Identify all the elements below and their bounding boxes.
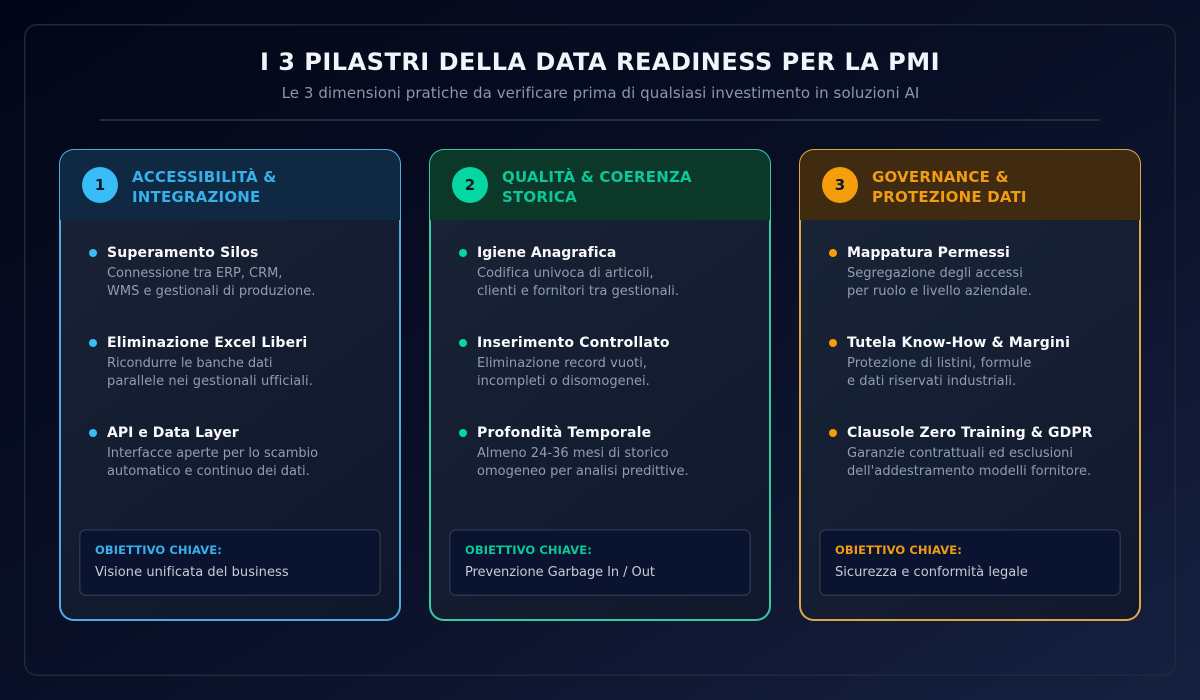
item: igiene anagrafica: Codifica univoca di articoli, <box>477 266 654 281</box>
item: eliminazione excel liberi: Eliminazione Excel Liberi <box>107 335 307 351</box>
item: profondità temporale: Profondità Temporale <box>477 425 651 441</box>
panel: qualità e coerenza storica <box>429 149 771 621</box>
item: inserimento controllato <box>459 335 670 389</box>
item: mappatura permessi: Segregazione degli accessi <box>847 266 1023 281</box>
item: profondità temporale <box>459 425 689 479</box>
item: mappatura permessi: Mappatura Permessi <box>847 245 1010 261</box>
item: superamento silos: Superamento Silos <box>107 245 259 261</box>
callout: obiettivo chiave 1: OBIETTIVO CHIAVE: <box>95 543 222 557</box>
item: tutela know-how e margini: e dati riservati industriali. <box>847 374 1016 389</box>
item: tutela know-how e margini <box>829 335 1070 389</box>
header: pillar 1: INTEGRAZIONE <box>132 188 260 206</box>
callout: obiettivo chiave 3: OBIETTIVO CHIAVE: <box>835 543 962 557</box>
item: api e data layer: API e Data Layer <box>107 425 239 441</box>
item: igiene anagrafica <box>459 245 679 299</box>
item: clausole zero training e gdpr: Garanzie contrattuali ed esclusioni <box>847 446 1073 461</box>
header: pillar 2: STORICA <box>502 188 577 206</box>
item: clausole zero training e gdpr: dell'addestramento modelli fornitore. <box>847 464 1091 479</box>
item: inserimento controllato: Inserimento Controllato <box>477 335 670 351</box>
item: superamento silos: Connessione tra ERP, CRM, <box>107 266 282 281</box>
callout: obiettivo chiave 1 <box>79 529 381 596</box>
callout: obiettivo chiave 2: OBIETTIVO CHIAVE: <box>465 543 592 557</box>
item: eliminazione excel liberi: parallele nei gestionali ufficiali. <box>107 374 313 389</box>
item: api e data layer <box>89 425 318 479</box>
header: pillar 1 <box>60 150 400 220</box>
header: pillar 3: GOVERNANCE & <box>872 168 1009 186</box>
item: eliminazione excel liberi: Ricondurre le banche dati <box>107 356 272 371</box>
item: igiene anagrafica: Igiene Anagrafica <box>477 245 616 261</box>
item: clausole zero training e gdpr <box>829 425 1093 479</box>
item: superamento silos <box>89 245 315 299</box>
item: inserimento controllato: Eliminazione record vuoti, <box>477 356 647 371</box>
item: mappatura permessi <box>829 245 1032 299</box>
header: pillar 3: 3 <box>835 176 845 194</box>
header: pillar 3 <box>800 150 1140 220</box>
item: clausole zero training e gdpr: Clausole Zero Training & GDPR <box>847 425 1093 441</box>
item: inserimento controllato: incompleti o disomogenei. <box>477 374 650 389</box>
item: api e data layer: automatico e continuo dei dati. <box>107 464 310 479</box>
item: profondità temporale: omogeneo per analisi predittive. <box>477 464 689 479</box>
header: pillar 2 <box>430 150 770 220</box>
item: eliminazione excel liberi <box>89 335 313 389</box>
header: pillar 1: 1 <box>95 176 105 194</box>
callout: obiettivo chiave 1: Visione unificata del business <box>95 564 289 580</box>
header: pillar 1: ACCESSIBILITÀ & <box>132 168 277 186</box>
item: tutela know-how e margini: Tutela Know-How & Margini <box>847 335 1070 351</box>
callout: obiettivo chiave 3: Sicurezza e conformità legale <box>835 564 1028 580</box>
panel: accessibilità e integrazione <box>59 149 401 621</box>
callout: obiettivo chiave 3 <box>819 529 1121 596</box>
item: mappatura permessi: per ruolo e livello aziendale. <box>847 284 1032 299</box>
header: pillar 2: QUALITÀ & COERENZA <box>502 168 692 186</box>
header: pillar 3: PROTEZIONE DATI <box>872 188 1027 206</box>
header: pillar 2: 2 <box>465 176 475 194</box>
callout: obiettivo chiave 2 <box>449 529 751 596</box>
item: igiene anagrafica: clienti e fornitori tra gestionali. <box>477 284 679 299</box>
title: I 3 PILASTRI DELLA DATA READINESS PER LA PMI <box>260 48 940 76</box>
item: tutela know-how e margini: Protezione di listini, formule <box>847 356 1031 371</box>
panel: governance e protezione dati <box>799 149 1141 621</box>
callout: obiettivo chiave 2: Prevenzione Garbage In / Out <box>465 564 655 580</box>
item: profondità temporale: Almeno 24-36 mesi di storico <box>477 446 669 461</box>
subtitle: Le 3 dimensioni pratiche da verificare prima di qualsiasi investimento in soluzioni AI <box>282 84 919 102</box>
item: superamento silos: WMS e gestionali di produzione. <box>107 284 315 299</box>
item: api e data layer: Interfacce aperte per lo scambio <box>107 446 318 461</box>
